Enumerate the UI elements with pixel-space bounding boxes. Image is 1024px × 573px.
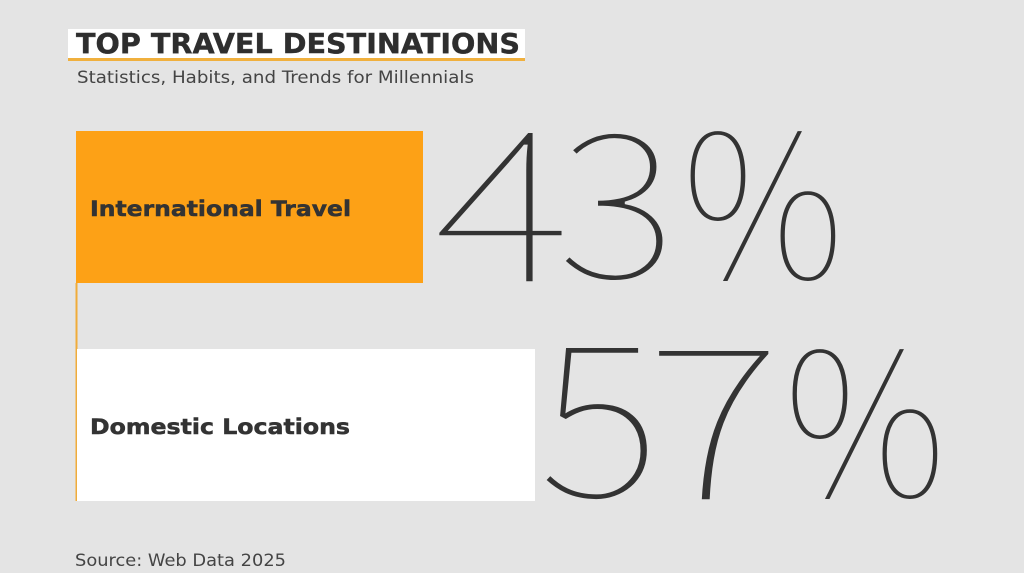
value: 43%: 4 xyxy=(433,34,572,344)
value: 43%: 3 xyxy=(556,43,677,337)
value: 57%: 7 xyxy=(645,253,782,563)
bar: domestic locations: Domestic Locations xyxy=(90,415,350,439)
source: Source: Web Data 2025 xyxy=(75,551,286,570)
bar: domestic locations xyxy=(77,349,535,501)
value: 43% xyxy=(433,34,845,344)
axis line xyxy=(76,283,78,501)
value: 57%: % xyxy=(783,263,947,556)
value: 57%: 5 xyxy=(538,249,661,559)
value: 57% xyxy=(538,249,947,563)
title: TOP TRAVEL DESTINATIONS xyxy=(76,28,520,60)
value: 43%: % xyxy=(681,45,845,338)
bar: international travel: International Travel xyxy=(90,197,351,221)
bar: international travel xyxy=(76,131,423,283)
subtitle: Statistics, Habits, and Trends for Millennials xyxy=(77,68,474,87)
